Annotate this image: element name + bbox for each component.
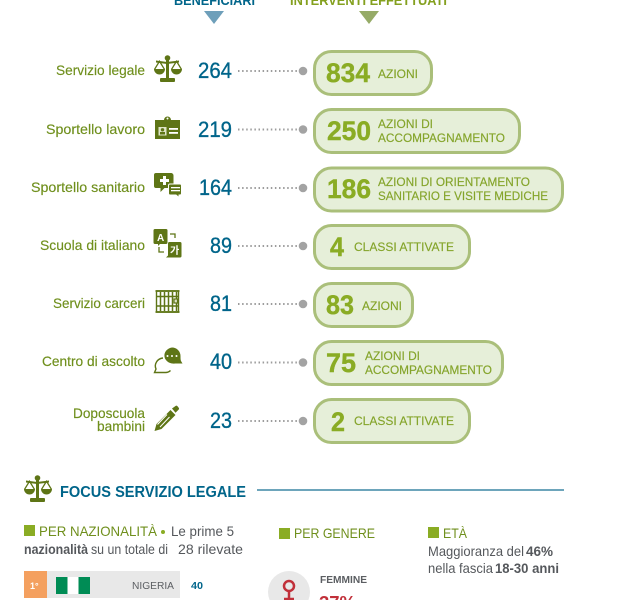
panel: età: 46% — [526, 543, 554, 559]
pill: 186 azioni: SANITARIO E VISITE MEDICHE — [378, 189, 548, 203]
pill: 250 azioni di accompagnamento: 250 — [327, 116, 371, 146]
pill: 4 classi attivate: CLASSI ATTIVATE — [354, 240, 454, 254]
pill: 834 azioni — [314, 52, 432, 94]
pill: 2 classi attivate — [314, 400, 470, 442]
pill: 83 azioni: 83 — [326, 290, 354, 320]
table row: nigeria — [24, 571, 203, 598]
pill: 834 azioni: AZIONI — [378, 67, 418, 81]
pill: 4 classi attivate — [314, 226, 470, 268]
row: doposcuola bambini — [73, 400, 470, 442]
row: sportello sanitario: Sportello sanitario — [31, 179, 145, 195]
panel: per nazionalità: PER NAZIONALITÀ — [39, 523, 158, 539]
row: sportello sanitario — [31, 168, 562, 211]
icon: translation — [154, 229, 182, 258]
row: scuola di italiano — [40, 226, 470, 268]
row: servizio legale — [56, 52, 432, 94]
pill: 75 azioni di accompagnamento: ACCOMPAGNAMENTO — [365, 363, 492, 377]
table row: nigeria: NIGERIA — [132, 580, 174, 592]
panel: età: ETÀ — [443, 525, 468, 541]
panel: per genere: PER GENERE — [294, 525, 375, 541]
row: centro di ascolto: 40 — [210, 349, 232, 374]
pill: 2 classi attivate: 2 — [331, 407, 345, 437]
pill: 186 azioni: 186 — [327, 174, 371, 204]
row: servizio carceri: 81 — [210, 291, 232, 316]
pill: 186 azioni: AZIONI DI ORIENTAMENTO — [378, 175, 530, 189]
row: sportello lavoro: Sportello lavoro — [46, 121, 145, 137]
icon: speech bubbles — [154, 348, 182, 373]
icon: translation: A — [157, 233, 164, 244]
icon: female symbol — [268, 571, 310, 600]
pill: 834 azioni: 834 — [326, 58, 370, 88]
pill: 250 azioni di accompagnamento: ACCOMPAGNAMENTO — [378, 131, 505, 145]
row: sportello lavoro: 219 — [198, 117, 232, 142]
row: doposcuola bambini: 23 — [210, 408, 232, 433]
icon: translation: 가 — [170, 244, 179, 257]
panel: per nazionalità — [24, 523, 243, 598]
panel: per genere — [268, 525, 375, 600]
row: scuola di italiano: Scuola di italiano — [40, 237, 145, 253]
pill: 2 classi attivate: CLASSI ATTIVATE — [354, 414, 454, 428]
row: scuola di italiano: 89 — [210, 233, 232, 258]
icon: prison bars — [156, 291, 180, 312]
panel: per nazionalità: nazionalità — [24, 541, 88, 557]
icon: scales — [24, 475, 52, 502]
row: sportello sanitario: 164 — [199, 175, 232, 200]
pill: 4 classi attivate: 4 — [330, 232, 344, 262]
panel: età: Maggioranza del — [428, 543, 524, 559]
pill: 250 azioni di accompagnamento — [314, 110, 520, 152]
pill: 75 azioni di accompagnamento: 75 — [326, 348, 356, 378]
pill: 83 azioni: AZIONI — [362, 299, 402, 313]
icon: medical chat — [154, 173, 182, 198]
row: servizio carceri — [53, 284, 412, 326]
row: servizio legale: Servizio legale — [56, 62, 145, 78]
row: sportello lavoro — [46, 110, 520, 152]
panel: età: nella fascia — [428, 560, 493, 576]
row: centro di ascolto: Centro di ascolto — [42, 353, 145, 369]
row: servizio legale: 264 — [198, 58, 232, 83]
icon: scales — [154, 55, 182, 82]
column header: interventi effettuati — [290, 0, 447, 24]
icon: id badge — [155, 117, 180, 139]
row: servizio carceri: Servizio carceri — [53, 295, 145, 311]
panel: per nazionalità: 28 rilevate — [178, 541, 243, 557]
pill: 75 azioni di accompagnamento — [314, 342, 502, 384]
row: doposcuola bambini: Doposcuola — [73, 405, 145, 421]
row: centro di ascolto — [42, 342, 502, 384]
icon: pencil — [154, 406, 179, 431]
pill: 250 azioni di accompagnamento: AZIONI DI — [378, 117, 433, 131]
pill: 186 azioni — [314, 168, 562, 211]
pill: 83 azioni — [314, 284, 412, 326]
panel: per nazionalità: su un totale di — [91, 541, 168, 557]
panel: per genere: FEMMINE — [320, 575, 367, 586]
heading: focus servizio legale: FOCUS SERVIZIO LEGALE — [60, 484, 246, 501]
row: doposcuola bambini: bambini — [97, 418, 145, 434]
table row: nigeria: 1° — [30, 581, 39, 591]
table row: nigeria: 40 — [191, 580, 203, 592]
pill: 75 azioni di accompagnamento: AZIONI DI — [365, 349, 420, 363]
panel: età: 18-30 anni — [495, 560, 559, 576]
panel: per nazionalità: Le prime 5 — [171, 523, 234, 539]
column header: beneficiari — [174, 0, 255, 24]
panel: età — [428, 525, 559, 576]
icon: flag of nigeria — [56, 577, 90, 594]
heading: focus servizio legale — [24, 475, 564, 502]
